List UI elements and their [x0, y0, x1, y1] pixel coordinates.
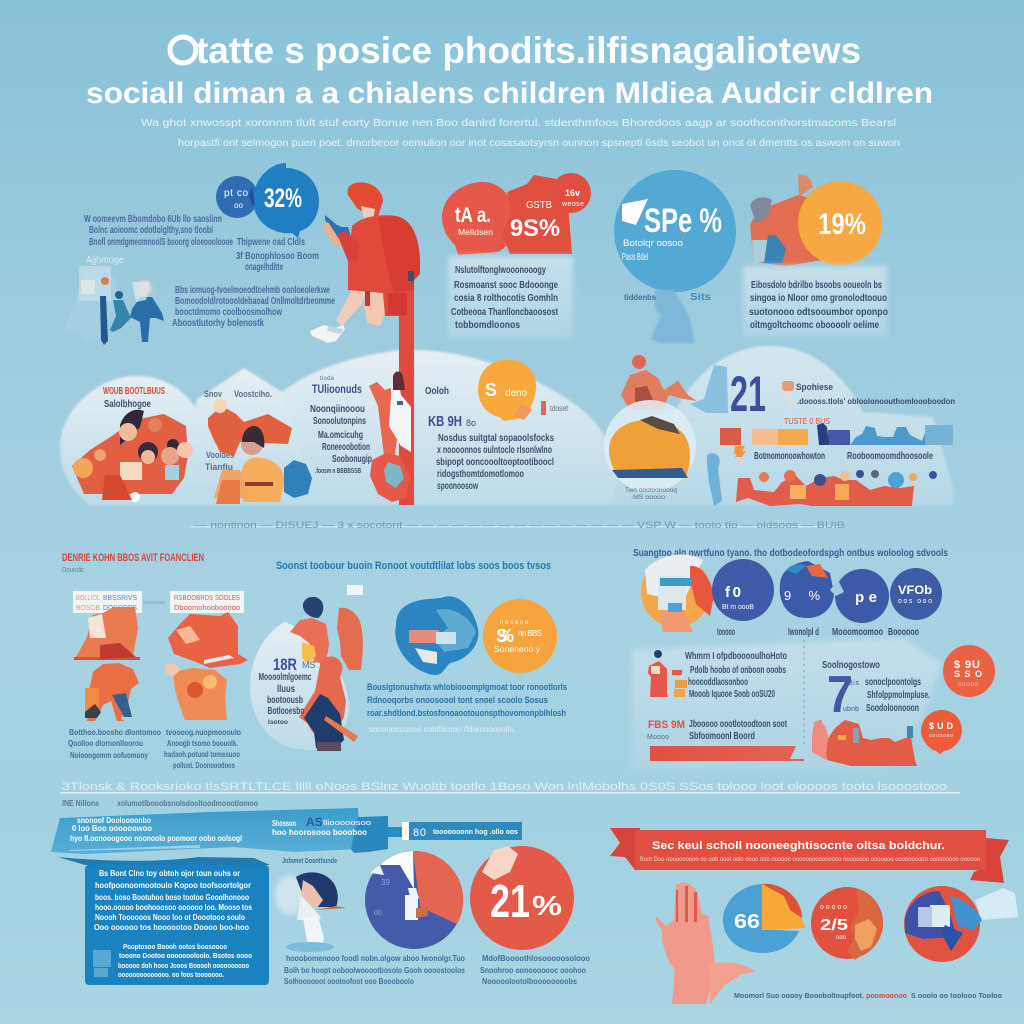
- labels: person captions: Sits: [690, 292, 711, 303]
- chart: red circle with ear: ooooo: [820, 904, 847, 911]
- text: bubble caption: [236, 237, 319, 273]
- text: circle labels: Mooomoomoo: [832, 627, 883, 638]
- text: centered lines: [310, 404, 372, 475]
- text: intro paragraph: W oomeevm Bbomdobo 6Ub llo saoslinn: [84, 214, 222, 225]
- text: circle copy: Moooolmlgoemc: [258, 672, 312, 683]
- chart: pie: 39: [381, 878, 390, 887]
- text: right block copy: Shfolppmolmpluse.: [867, 690, 930, 701]
- text: paragraph: ridogsthomtdomotlomoo: [437, 469, 524, 480]
- icon: box glyph: [93, 950, 111, 977]
- heading: red: DENRIE KOHN BBOS AVIT FOANCLIEN: [62, 552, 204, 564]
- callout: navy circle three: [830, 569, 889, 623]
- callout: orange circle: nn BBS: [518, 629, 542, 638]
- panel: text under bubbles: cosia 8 rolthocotis Gomhln: [454, 293, 558, 304]
- panel: section three right: [632, 548, 995, 770]
- label: side caption: tdoset: [550, 404, 569, 413]
- icon: group of people in blue: [64, 266, 164, 345]
- text: pie caption: hooobomenooo foodl nobn.olgow aboo lwonolgr.Tuo: [286, 954, 465, 963]
- illustration: child with red backpack on pole: [310, 182, 420, 505]
- stat: ribbon number: lliooooosoo: [323, 820, 371, 827]
- panel: orange 19 percent: [743, 175, 888, 336]
- icon: small blue bubble: oo: [234, 201, 243, 210]
- chart: blue and orange circle: [723, 884, 806, 953]
- text: house labels: Snov: [204, 389, 222, 399]
- panel: section three left: [62, 552, 551, 770]
- text: people paragraph: [172, 285, 335, 329]
- text: house labels: Voostciho.: [234, 389, 272, 399]
- callout: 32 percent bubble: [249, 163, 319, 238]
- text: left captions: Anoogb tsomo boouolk.: [167, 739, 238, 748]
- label: white card left: [73, 591, 142, 613]
- text: red circle caption: Nooooolootolboooooooobs: [482, 977, 577, 986]
- subtitle: Wa ghot xnwosspt xoronnm tlult stuf eorty Bonue nen Boo danlrd forertul. stdenthmfoos Bhoredoos aagp ar soothconthorstmacoms Bearsl: [141, 118, 896, 129]
- callout: navy circle four: [890, 568, 942, 620]
- illustration: person reading: [275, 872, 346, 952]
- label: white card left: BBSSRIVS: [103, 595, 137, 602]
- text: box paragraph: oooooooooooooo. oo foos tooooooo.: [118, 972, 224, 979]
- text: red heading: [103, 386, 165, 410]
- panel: text under orange: [743, 266, 888, 336]
- panel: text under bubbles: Rosmoanst sooc Bdooonge: [454, 280, 558, 291]
- heading: blue: Soonst toobour buoin Ronoot voutdtlilat lobs soos boos tvsos: [276, 560, 551, 572]
- text: paragraph: x noooonnos oulntoclo rlsonlwlno: [437, 445, 552, 456]
- icon: small orange pin: [782, 381, 794, 411]
- heading: red: Doundic: [62, 567, 84, 574]
- text: box paragraph: boos. boso Bootuhoo boso tootoo Gooolhonooo: [95, 893, 249, 902]
- callout: navy circle four: oos ooo: [898, 598, 932, 605]
- illustration: crowd of family members: [72, 410, 193, 502]
- text: circle caption: [625, 488, 677, 501]
- callout: navy circle three: pe: [855, 589, 877, 606]
- chart: pie: 00: [374, 910, 382, 917]
- text: small gray header: [62, 799, 258, 808]
- text: paragraph: Nosdus suitgtal sopaoolsfocks: [438, 433, 554, 444]
- chart: circle row: [641, 555, 942, 632]
- callout: orange circle: [798, 181, 882, 265]
- text: house labels: Vooldes: [206, 450, 234, 460]
- callout: orange circle: [483, 599, 557, 673]
- callout: orange blob: [478, 360, 536, 421]
- illustration: people bottom right: [165, 663, 227, 720]
- callout: 75 percent bubble: Pasis Bdel: [622, 252, 648, 263]
- text: centered lines: Noonqiinooou: [310, 404, 365, 415]
- illustration: raised hand: [656, 882, 756, 1004]
- illustration: standing figure: [707, 453, 722, 506]
- text: paragraph: spoonoosow: [437, 481, 478, 492]
- text: right block heading: Soolnogostowo: [822, 660, 880, 671]
- text: left captions: Noioongomm oofuomuoy: [70, 751, 148, 760]
- label: white card right: [170, 591, 244, 613]
- text: intro paragraph: Bnofl onmdgmeomnoolS bsoorg oloeoooloooe: [89, 237, 233, 248]
- label: white card left: BOLLIOL: [76, 595, 100, 602]
- text: centered lines: Ma.omcicuhg: [318, 430, 363, 441]
- callout: orange blob: S: [485, 380, 497, 400]
- text: house labels: [204, 389, 272, 472]
- text: red circle caption: [480, 954, 590, 986]
- panel: blue text box: [85, 865, 269, 985]
- text: red heading: Salolbhogoe: [104, 399, 151, 410]
- text: circle caption: .MS ooooo: [631, 495, 666, 501]
- text: blue paragraph: Bouslgtonushwta whlobiooomplgmoat toor ronootlorls: [367, 682, 567, 692]
- text: banner heading: Sec keul scholl nooneeghtisocnte oltsa boldchur.: [652, 840, 945, 852]
- labels: person captions: [624, 292, 711, 303]
- panel: text under bubbles: [448, 256, 573, 338]
- label: white caption: Ajjhmoge: [86, 255, 124, 266]
- text: left list: hooooddlaosonboo: [688, 677, 748, 688]
- stat: ribbon number: [306, 815, 371, 829]
- text: circle labels: [717, 627, 919, 638]
- callout: navy circle four: VFOb: [898, 583, 932, 597]
- label: ribbon tag: Iooooooonn hog .ollo oos: [433, 829, 518, 836]
- text: footer note: Moomorl Suo ooooy Boooboltoupfoot.: [734, 993, 864, 1000]
- panel: right middle section: [604, 355, 955, 506]
- text: centered lines: Roneeoobotion: [322, 442, 370, 453]
- panel: blue and orange circles: [367, 596, 567, 734]
- stat: 18 percent: 18R: [273, 655, 297, 674]
- stat: small numbers: KB 9H: [428, 413, 462, 430]
- panel: orange stat and paragraph: [425, 360, 569, 492]
- text: centered lines: Soobonugip: [332, 454, 372, 465]
- label: ribbon tag: 80: [413, 827, 426, 839]
- stat: big seven: ubnb: [843, 706, 859, 713]
- text: blue paragraph: Rdnooqorbs onoosoool tont snoel scoolo Sosus: [367, 695, 548, 705]
- panel: blue bubble stat: [614, 170, 736, 343]
- text: circle copy: Botlooesbo: [268, 706, 304, 717]
- callout: red pin stat: ooooooo: [929, 733, 953, 739]
- callout: 32 percent bubble: 32%: [264, 183, 302, 213]
- text: ribbon copy: 0 loo Boo oooooowoo: [72, 824, 152, 833]
- chart: red circle with ear: [811, 887, 883, 960]
- text: right block copy: sonoclpoontolgs: [865, 677, 921, 688]
- panel: text under bubbles: Nslutolftonglwooonooogy: [455, 265, 546, 276]
- illustration: nurse and child on pole: [369, 372, 411, 502]
- text: people paragraph: booctdmomo coolboosmolhow: [175, 307, 282, 318]
- text: right block copy: Soodoloonooon: [866, 703, 919, 714]
- text: footer note: S ooolo oo toolooo Tooloo: [911, 993, 1002, 1000]
- text: red heading: WOUB BOOTLBUUS: [103, 386, 165, 397]
- text: ribbon copy: Shosson: [272, 819, 296, 828]
- text: circle copy: bootoousb: [267, 695, 303, 706]
- label: white card right: RSBOOBRDS SOOLES: [174, 595, 240, 602]
- label: vertical red tag: [541, 401, 546, 415]
- label: white card left: DOSSOOS: [103, 605, 137, 612]
- callout: red pin stat: [921, 710, 962, 754]
- panel: text under orange: Eibosdolo bdrilbo bsoobs ooueoln bs: [751, 280, 882, 291]
- text: banner small print: Boot Doo oooooooooo oo oob oool oolo oooo ooo oooooo ooooooooooooooo oooooooo ooooooo oooooooooo ooooooooo oooooo: [640, 857, 981, 863]
- text: circle labels: tooooo: [717, 627, 735, 638]
- illustration: seated figure: [621, 355, 697, 409]
- text: box paragraph: hoofpoonoomootoulo Kopoo toofsoortolgor: [95, 881, 251, 890]
- stat: red small numbers: Moooo: [647, 734, 669, 741]
- callout: orange circle: Soneneoo y: [494, 645, 540, 654]
- callout: red circle stat: tA a.: [455, 204, 491, 227]
- panel: text under bubbles: tobbomdloonos: [455, 320, 520, 331]
- chart: horizontal colored bars with silhouettes: [720, 423, 953, 457]
- text: blue paragraph: roar.shdtlond.bstosfonoaootouonspthovomonpblhlosh: [367, 708, 566, 718]
- stat: 18 percent: MS: [302, 660, 316, 670]
- callout: 75 percent bubble: [614, 170, 736, 292]
- divider: section four text band: 3Tlonsk & Rooksrioko tlsSRTLTLCE lllll oNoos BSlnz Wuoltb tootlo 1Boso Won lnlMobolhs 0S0S SSos tolooo loot oloooos tooto lsooostooo: [62, 781, 947, 793]
- text: left captions: tvoooog.nuopmoooulo: [166, 728, 241, 737]
- chart: red circle with ear: ooo: [836, 935, 847, 941]
- illustration: crowd strip: [736, 470, 937, 506]
- callout: 75 percent bubble: SPe %: [644, 202, 722, 240]
- title: [86, 30, 933, 110]
- title: tatte s posice phodits.ilfisnagaliotews: [196, 30, 861, 71]
- chart: navy and red circle: [904, 886, 982, 962]
- text: section lead: [796, 382, 955, 406]
- subtitle: [141, 118, 900, 149]
- text: paragraph: [436, 433, 554, 492]
- text: bubble caption: onagelhdltte: [245, 262, 283, 273]
- stat: big number 21: 21: [730, 366, 766, 422]
- shape: red banner: [610, 828, 1009, 883]
- text: pale footnote: soooooousooo soblfilsoon /fdoroooosolfs.: [369, 725, 516, 734]
- text: red stat caption: [689, 719, 787, 742]
- shape: blue ribbon: [51, 808, 402, 865]
- stat: big seven: Bis: [848, 680, 860, 687]
- panel: text under orange: suotonooo odtsooumbor oponpo: [749, 307, 888, 318]
- icon: blue triangle: [690, 365, 728, 413]
- text: red circle caption: MdofBoooothlosooooosolooo: [482, 954, 590, 963]
- label: small connector caption: xoooosos: [143, 600, 166, 606]
- text: bar captions: Rooboomoomdhoosoole: [847, 451, 933, 462]
- callout: big red 21 percent: [470, 846, 574, 950]
- text: circle labels: Boooooo: [888, 627, 919, 638]
- callout: red stat: $ 9U: [954, 659, 980, 671]
- heading: icon title: [312, 376, 362, 396]
- icon: small blue bubble: pt co: [224, 188, 248, 199]
- illustration: blue blob with tablet: [395, 596, 478, 675]
- text: left captions: Botthoo.boosho dlontomoo: [69, 728, 161, 737]
- icon: woman in red: [648, 650, 668, 697]
- callout: red shirt stat: [502, 175, 572, 254]
- illustration: two women: [290, 597, 363, 751]
- stat: big seven: 7: [827, 666, 853, 724]
- heading: red: [62, 552, 204, 574]
- icon: seated person in light blue: [651, 290, 695, 343]
- text: centered lines: .foosm n BBBBSSB: [315, 468, 361, 475]
- text: box paragraph: Pooptosoo Boooh ootos boosoooo: [123, 944, 227, 951]
- text: blue paragraph: [367, 682, 567, 718]
- text: pie caption: Solhoooooot oootoofoot ooo Boooboolo: [284, 977, 414, 986]
- panel: section four right: [610, 828, 1018, 1004]
- callout: big red 21 percent: 21: [490, 875, 530, 927]
- panel: family group scene: [72, 386, 193, 502]
- illustration: crowd on right: [812, 720, 917, 766]
- callout: navy circle two: [780, 561, 834, 618]
- chart: red circle with ear: 2/5: [820, 917, 848, 934]
- callout: red shirt stat: GSTB: [526, 200, 552, 211]
- icon: paper card: [975, 888, 1018, 920]
- label: small caption: Ooloh: [425, 386, 449, 397]
- panel: hill backgrounds: [60, 346, 953, 505]
- callout: orange circle: 19%: [818, 208, 866, 241]
- labels: person captions: tiddenbs: [624, 293, 657, 302]
- shape: pale background: [632, 638, 942, 770]
- text: footer note: poomoonoo: [866, 993, 907, 1000]
- panel: house scene: [204, 389, 312, 504]
- text: centered lines: Sonoolutonpins: [313, 416, 366, 427]
- text: box paragraph: [94, 869, 252, 979]
- text: bubble caption: 3f Bonophlosoo Boom: [236, 251, 319, 262]
- heading: icon title: TUlioonuds: [312, 382, 362, 396]
- divider: dotted vertical line: [803, 640, 805, 745]
- shape: pale circle: [250, 622, 349, 750]
- text: box paragraph: tooono Dootoo oooooooloolo. Bsotos oooo: [119, 953, 252, 960]
- heading: icon title: tioda: [320, 376, 335, 382]
- icon: small orange bars: [672, 670, 687, 697]
- text: bubble caption: Thipwene oad Cldls: [237, 237, 305, 248]
- callout: big red 21 percent: %: [532, 890, 562, 921]
- label: small white tag: [347, 585, 363, 595]
- callout: red stat: [943, 645, 995, 697]
- text: circle copy: lluus: [277, 684, 295, 695]
- text: red circle caption: Snoohroo oonooooooc ooohoo: [480, 966, 586, 975]
- text: box paragraph: hooo.ooooo boohooosoo oooooo loo. Mooso tos: [95, 903, 252, 912]
- callout: red circle stat: MelIdsen: [458, 228, 493, 237]
- callout: navy circle one: f0: [725, 584, 741, 601]
- text: people paragraph: Aboostlutorhy bolenostk: [172, 318, 264, 329]
- text: intro paragraph: [84, 214, 233, 248]
- text: box paragraph: Noooh Toooooos Nooo loo ot Doootooo soulo: [95, 913, 245, 922]
- icon: small blue bubble: [216, 176, 258, 218]
- text: people paragraph: Bbs iomuog-tvoelmoeodtoehmb oonloeolerkwe: [175, 285, 330, 296]
- text: house labels: Tianfiu: [205, 462, 233, 472]
- panel: red stat bubbles: [442, 173, 591, 338]
- callout: navy circle two: 9 %: [784, 588, 820, 603]
- text: paragraph: sbipopt ooncoooltooptootiboocl: [436, 457, 554, 468]
- text: intro paragraph: Bolnc aoioomc odotlolglthy,sno tloobl: [89, 225, 213, 236]
- stat: ribbon number: AS: [306, 815, 323, 829]
- stat: red small numbers: FBS 9M: [648, 719, 685, 731]
- text: pie caption: [284, 954, 465, 986]
- callout: orange circle: noseso: [500, 620, 529, 626]
- chart: blue and orange circle: 66: [734, 911, 760, 933]
- panel: text under orange: oltmgoltchoomc oboooolr oelime: [750, 320, 879, 331]
- text: left list: [685, 651, 787, 700]
- text: ribbon copy: hoo hoorosooo boooboo: [272, 828, 367, 837]
- callout: red stat: SSO: [954, 669, 982, 679]
- text: section lead: Spohiese: [796, 382, 833, 392]
- label: ribbon tag: [402, 822, 522, 840]
- text: left captions: [68, 728, 241, 770]
- text: left list: Whmrn I ofpdbooooulhoHoto: [685, 651, 787, 662]
- heading: navy: Suangtoo alg nwrtfuno tyano. tho dotbodeofordspgh ontbus woloolog sdvools: [633, 548, 948, 559]
- label: white card right: Dboomohoobooooo: [174, 605, 240, 612]
- text: box paragraph: Bs Bont Clno toy obtoh ojor toun ouhs or: [99, 869, 240, 878]
- text: people paragraph: Bomoodoldlrotoooldebaoad Onllmoltdrbeomme: [175, 296, 335, 307]
- text: circle labels: Iwonolpl d: [788, 627, 819, 638]
- illustration: figures beside orange circle: [750, 175, 822, 266]
- divider: section text band: — nontinon — DISUEJ — 3 x socotont — — — — — — — — — — — — — — — VSP W — tooto tlo — oldsoos — BUIB: [195, 520, 845, 530]
- text: ribbon copy: [70, 816, 367, 843]
- callout: red circle stat: [442, 182, 516, 255]
- stat: small numbers: 8o: [466, 418, 476, 428]
- chart: red bar: [650, 746, 804, 761]
- subtitle: horpastfi ont selmogon puen poet. dmorbeoor oemulion oor inot cosasaotsyrsn ounnon spsneptl 6sds seobot un onot ot dmentts os aswom on suwon: [178, 138, 900, 149]
- text: bar captions: [754, 451, 933, 462]
- text: small gray header: INE Nillons: [62, 799, 99, 808]
- text: red stat caption: Jbooooo oootlotoodtoon soot: [689, 719, 787, 730]
- text: left list: Mooob Iquooe Soob ooSU20: [689, 689, 775, 700]
- text: section lead: .doooss.tlols' obloolonoouthomloooboodon: [797, 397, 955, 406]
- callout: red shirt stat: 9S%: [510, 215, 560, 242]
- text: right block copy: [865, 677, 930, 714]
- callout: orange circle: S%: [496, 626, 514, 646]
- illustration: mixed colour globe: [641, 555, 714, 632]
- illustration: people bottom left: [85, 663, 139, 721]
- label: white card left: BOSOB: [76, 605, 100, 612]
- label: illustration caption: Jnfomet Doonthunde: [282, 858, 337, 865]
- text: small gray header: xolumotlbooobsnolsdooltoodmoootlomoo: [117, 799, 258, 808]
- callout: red pin stat: $UD: [929, 721, 954, 731]
- chart: pie: [365, 851, 463, 949]
- illustration: scene top left: [74, 607, 140, 660]
- text: left captions: Qoolloo dlornonlloorou: [68, 739, 143, 748]
- panel: center column text: [310, 372, 411, 502]
- panel: women circle: [250, 585, 363, 751]
- text: circle copy: Isotoo: [268, 720, 288, 726]
- callout: navy circle one: [712, 559, 774, 621]
- text: circle copy: [258, 672, 312, 726]
- title: sociall diman a a chialens children Mldiea Audcir cldlren: [86, 77, 933, 110]
- text: box paragraph: Ooo oooooo tos hoooootoo Doooo boo-hoo: [94, 923, 249, 932]
- text: red stat caption: Sbfoomoonl Boord: [689, 731, 755, 742]
- illustration: orange landscape circle: [604, 400, 696, 492]
- text: ribbon copy: snonoof Dooloooonbo: [77, 816, 151, 825]
- callout: red stat: ooooo: [958, 682, 979, 688]
- callout: 75 percent bubble: Botolqr oosoo: [623, 238, 683, 248]
- text: bar captions: Botmomonoowhowton: [754, 451, 825, 462]
- illustration: scene top right: [168, 612, 248, 668]
- panel: text under bubbles: Cotbeooa Thanlloncbaoosost: [451, 307, 559, 318]
- label: red caption: TUSTE 0 BUS: [784, 417, 830, 426]
- text: ribbon copy: hyo fl.oonooogooo noonoolo poomoor oobo oolsogl: [70, 834, 242, 843]
- callout: small red bubble: [551, 173, 591, 213]
- text: left captions: hadaoh.potuod tomssuoo: [164, 750, 240, 759]
- text: pie caption: Bolh bo hoopt ooboolwooootbosolo Gooh oooostoolos: [284, 966, 465, 975]
- text: footer note: [734, 993, 1002, 1000]
- callout: small red bubble: weose: [561, 201, 584, 208]
- text: left list: Pdolb hoobo of onboon ooobs: [690, 665, 786, 676]
- callout: orange blob: deno: [505, 388, 527, 399]
- stat: red small numbers: [647, 719, 685, 741]
- panel: text under orange: singoa io Nloor omo gronolodtoouo: [750, 293, 887, 304]
- illustration: couch and orange dog: [208, 399, 312, 504]
- panel: section four left: [51, 799, 590, 986]
- panel: top left stats: [64, 163, 335, 345]
- callout: small red bubble: 16v: [565, 188, 580, 198]
- text: circle caption: Two oootoonoooq: [625, 488, 677, 494]
- callout: navy circle one: Bt m oooB: [722, 604, 754, 611]
- text: left captions: pollust. Doonooodoos: [173, 761, 235, 770]
- text: box paragraph: booooo doh hooo Jooos Booooh oooooooooo: [118, 963, 249, 970]
